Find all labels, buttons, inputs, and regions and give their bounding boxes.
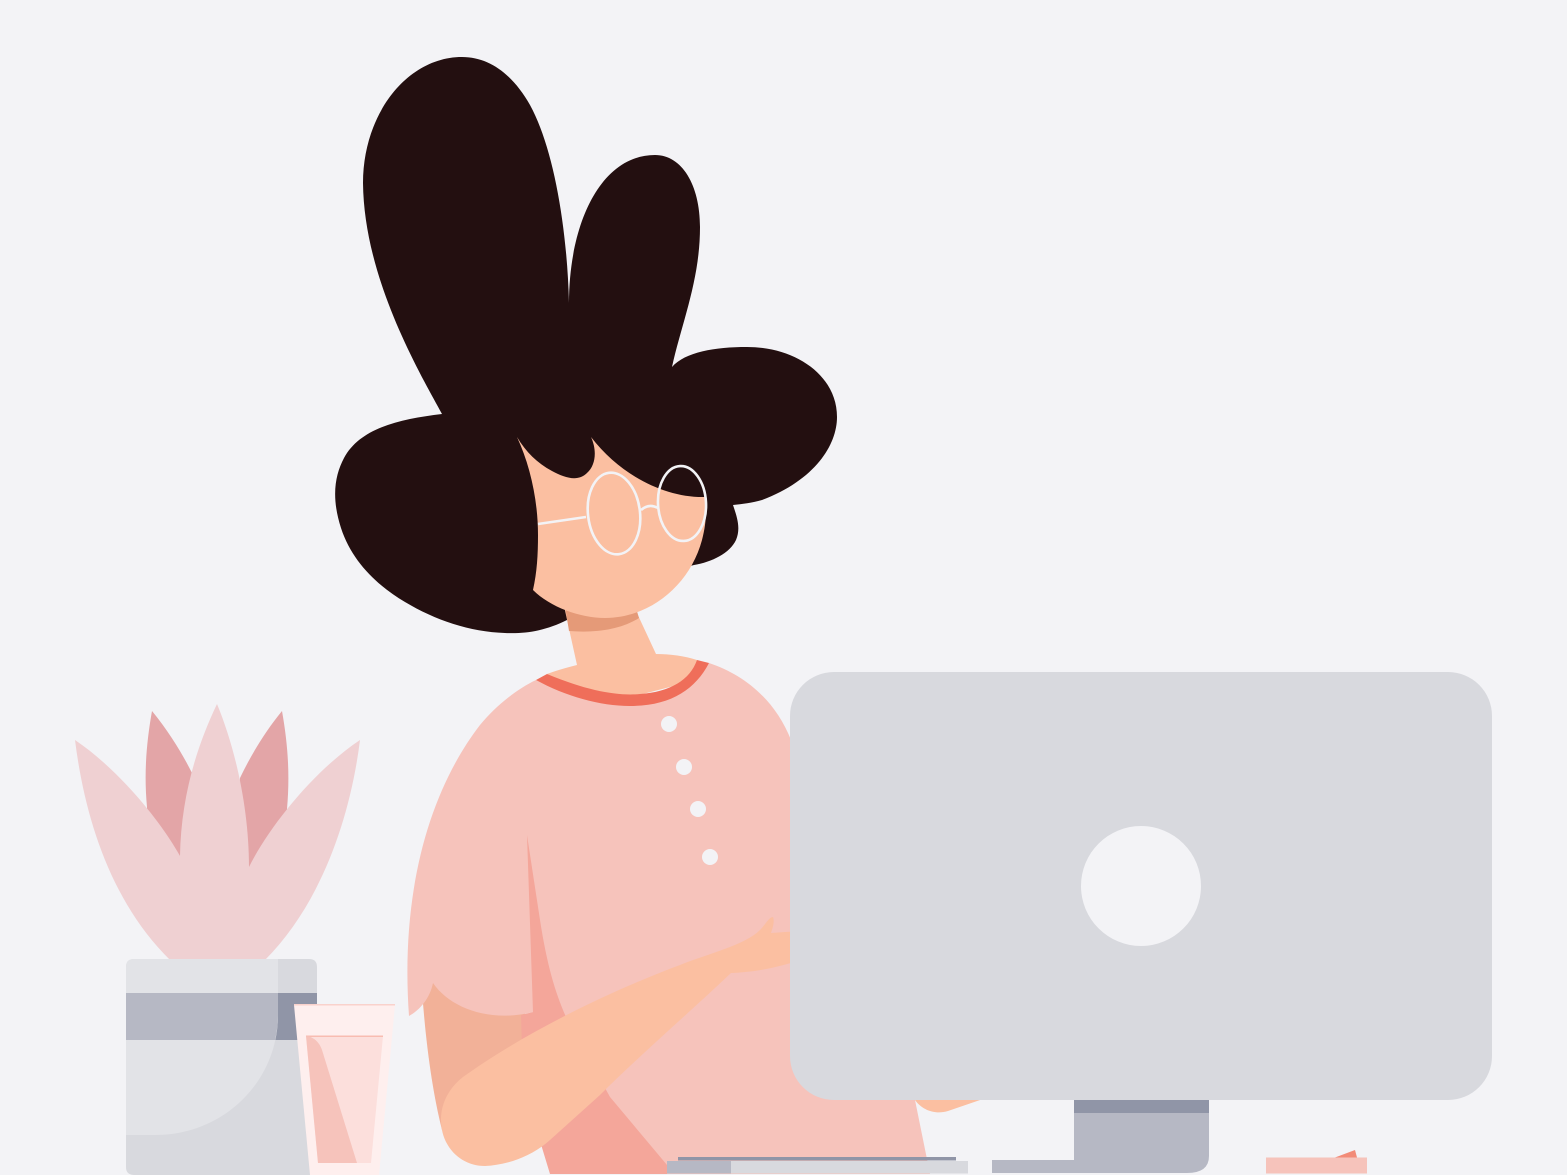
pot light band (126, 993, 278, 1040)
pot highlight (126, 959, 278, 1135)
hair (335, 57, 837, 633)
woman (335, 57, 983, 1174)
far hand (915, 1099, 983, 1112)
neck shadow (565, 606, 639, 632)
desktop computer (790, 672, 1492, 1173)
book on desk (1266, 1150, 1367, 1174)
glass body (294, 1005, 395, 1175)
monitor stand (992, 1100, 1209, 1173)
shirt (407, 663, 930, 1174)
back right leaf (228, 711, 288, 880)
back arm (421, 975, 530, 1130)
keyboard top edge (678, 1157, 956, 1160)
monitor logo (1081, 826, 1201, 946)
pot dark band (126, 993, 317, 1040)
potted plant (75, 704, 360, 1175)
water (306, 1036, 383, 1163)
monitor screen back (790, 672, 1492, 1100)
front arm and hand (441, 917, 800, 1166)
water surface (306, 1036, 383, 1037)
shirt buttons (661, 716, 718, 865)
water shadow (306, 1036, 357, 1163)
keyboard dark section (667, 1161, 731, 1174)
glasses (538, 465, 708, 557)
stand shadow band (1074, 1100, 1209, 1113)
shirt shadow fold (521, 835, 667, 1174)
bookmark (1335, 1150, 1357, 1158)
keyboard (667, 1157, 968, 1174)
glass rim (294, 1004, 395, 1006)
pot body (126, 959, 317, 1175)
neck (547, 606, 697, 705)
glass of water (294, 1004, 395, 1175)
back left leaf (146, 711, 205, 880)
face (517, 437, 706, 618)
keyboard body (667, 1161, 968, 1174)
book (1266, 1158, 1367, 1174)
front leaves (75, 704, 360, 960)
collar (536, 660, 709, 706)
